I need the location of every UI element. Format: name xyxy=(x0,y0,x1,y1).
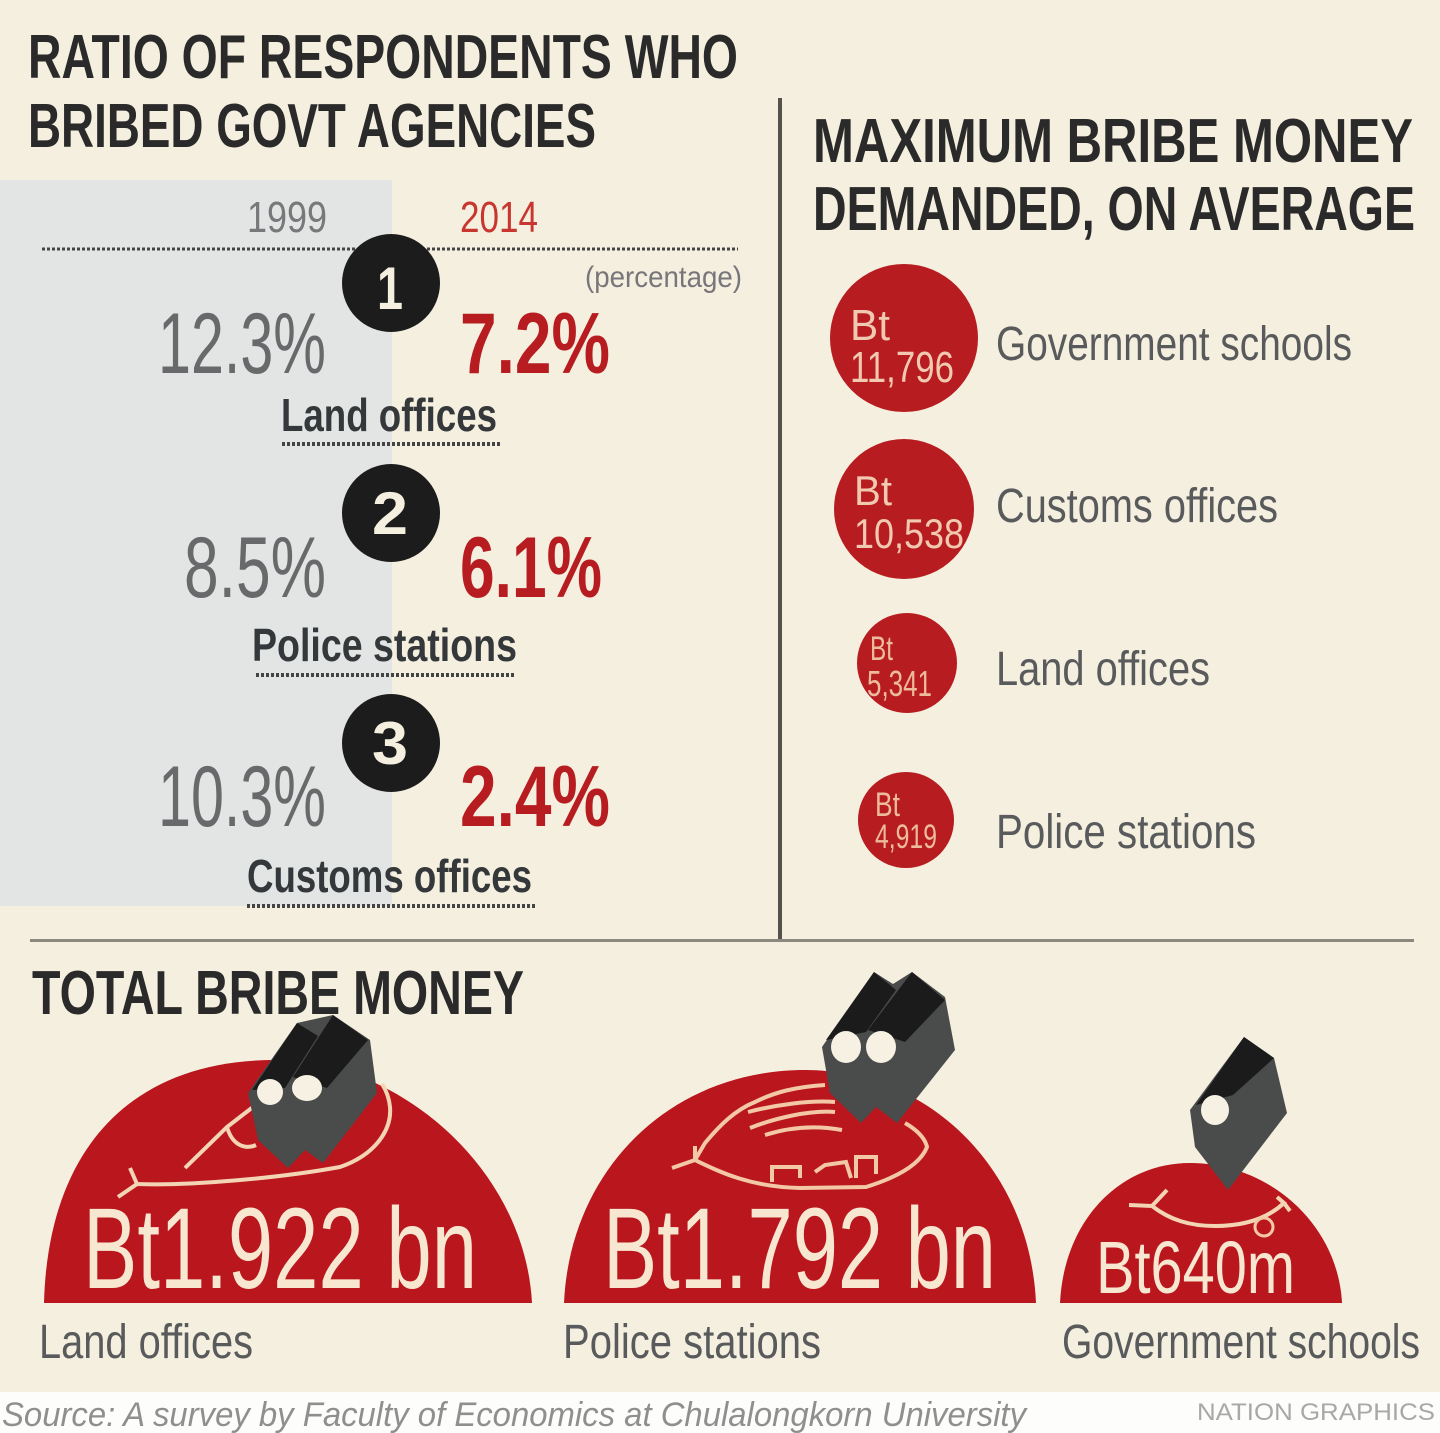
year header row: 2014 xyxy=(460,193,538,242)
title: ratio of respondents: BRIBED GOVT AGENCIES xyxy=(28,92,596,161)
title: total bribe money: TOTAL BRIBE MONEY xyxy=(32,959,524,1028)
ratio row 2: police stations xyxy=(184,464,602,675)
illustration: land plot outline xyxy=(118,1084,390,1197)
credit: NATION GRAPHICS xyxy=(1197,1399,1435,1426)
bubble: land offices: Land offices xyxy=(996,643,1210,696)
bubble: customs offices: Bt xyxy=(854,467,892,514)
icon: school seal xyxy=(1255,1218,1273,1236)
ratio row 2: police stations: 6.1% xyxy=(460,520,602,616)
title: ratio of respondents: RATIO OF RESPONDENTS WHO xyxy=(28,23,738,92)
ratio row 1: land offices: 12.3% xyxy=(158,296,326,392)
bubble: government schools: 11,796 xyxy=(850,343,954,392)
title: maximum bribe money xyxy=(813,107,1415,244)
ratio row 3: customs offices: 10.3% xyxy=(158,749,326,845)
bubble: police stations: Bt xyxy=(875,786,900,824)
total: police stations: Police stations xyxy=(563,1316,821,1369)
ratio row 2: police stations: 8.5% xyxy=(184,520,326,616)
total: land offices: Bt1.922 bn xyxy=(83,1185,477,1313)
bubble: land offices xyxy=(857,613,1210,713)
ratio row 1: land offices: 7.2% xyxy=(460,296,610,392)
bubble: police stations xyxy=(858,772,1256,868)
ratio row 3: customs offices: Customs offices xyxy=(247,850,532,902)
illustration: school outline xyxy=(1129,1190,1290,1226)
year header row xyxy=(42,193,742,294)
bubble: police stations: 4,919 xyxy=(875,818,937,856)
bubble: land offices: Bt xyxy=(870,630,893,668)
ratio row 3: customs offices xyxy=(158,694,610,906)
bubble: customs offices xyxy=(834,439,1278,579)
bubble: government schools: Government schools xyxy=(996,318,1352,371)
illustration: police station outline xyxy=(672,1085,927,1188)
panel: 1999 grey column background xyxy=(0,180,392,906)
bubble: government schools: Bt xyxy=(850,301,890,350)
bubble: police stations: Police stations xyxy=(996,806,1256,859)
ratio row 1: land offices: Land offices xyxy=(281,389,497,441)
icon: money bundle xyxy=(1190,1037,1287,1190)
ratio row 1: land offices: 1 xyxy=(377,255,403,322)
bubble: customs offices: 10,538 xyxy=(854,510,964,557)
total: land offices: Land offices xyxy=(39,1316,253,1369)
ratio row 3: customs offices: 3 xyxy=(372,710,408,777)
bubble: government schools xyxy=(830,264,1352,412)
source note: Source: A survey by Faculty of Economics at Chulalongkorn University xyxy=(2,1396,1028,1433)
icon: money bundles xyxy=(822,972,955,1123)
year header row: (percentage) xyxy=(585,261,742,294)
total: police stations: Bt1.792 bn xyxy=(603,1185,996,1313)
ratio row 2: police stations: 2 xyxy=(372,480,408,547)
icon: money bundles xyxy=(248,1015,377,1168)
bubble: land offices: 5,341 xyxy=(867,663,932,704)
total: government schools: Bt640m xyxy=(1096,1226,1295,1309)
year header row: 1999 xyxy=(247,193,327,242)
total: government schools xyxy=(1060,1037,1420,1369)
ratio row 3: customs offices: 2.4% xyxy=(460,749,610,845)
title: ratio of respondents xyxy=(28,23,738,161)
bubble: customs offices: Customs offices xyxy=(996,480,1278,533)
total: land offices xyxy=(39,1015,532,1369)
ratio row 2: police stations: Police stations xyxy=(252,619,517,671)
ratio row 1: land offices xyxy=(158,234,610,444)
total: police stations xyxy=(563,972,1036,1369)
